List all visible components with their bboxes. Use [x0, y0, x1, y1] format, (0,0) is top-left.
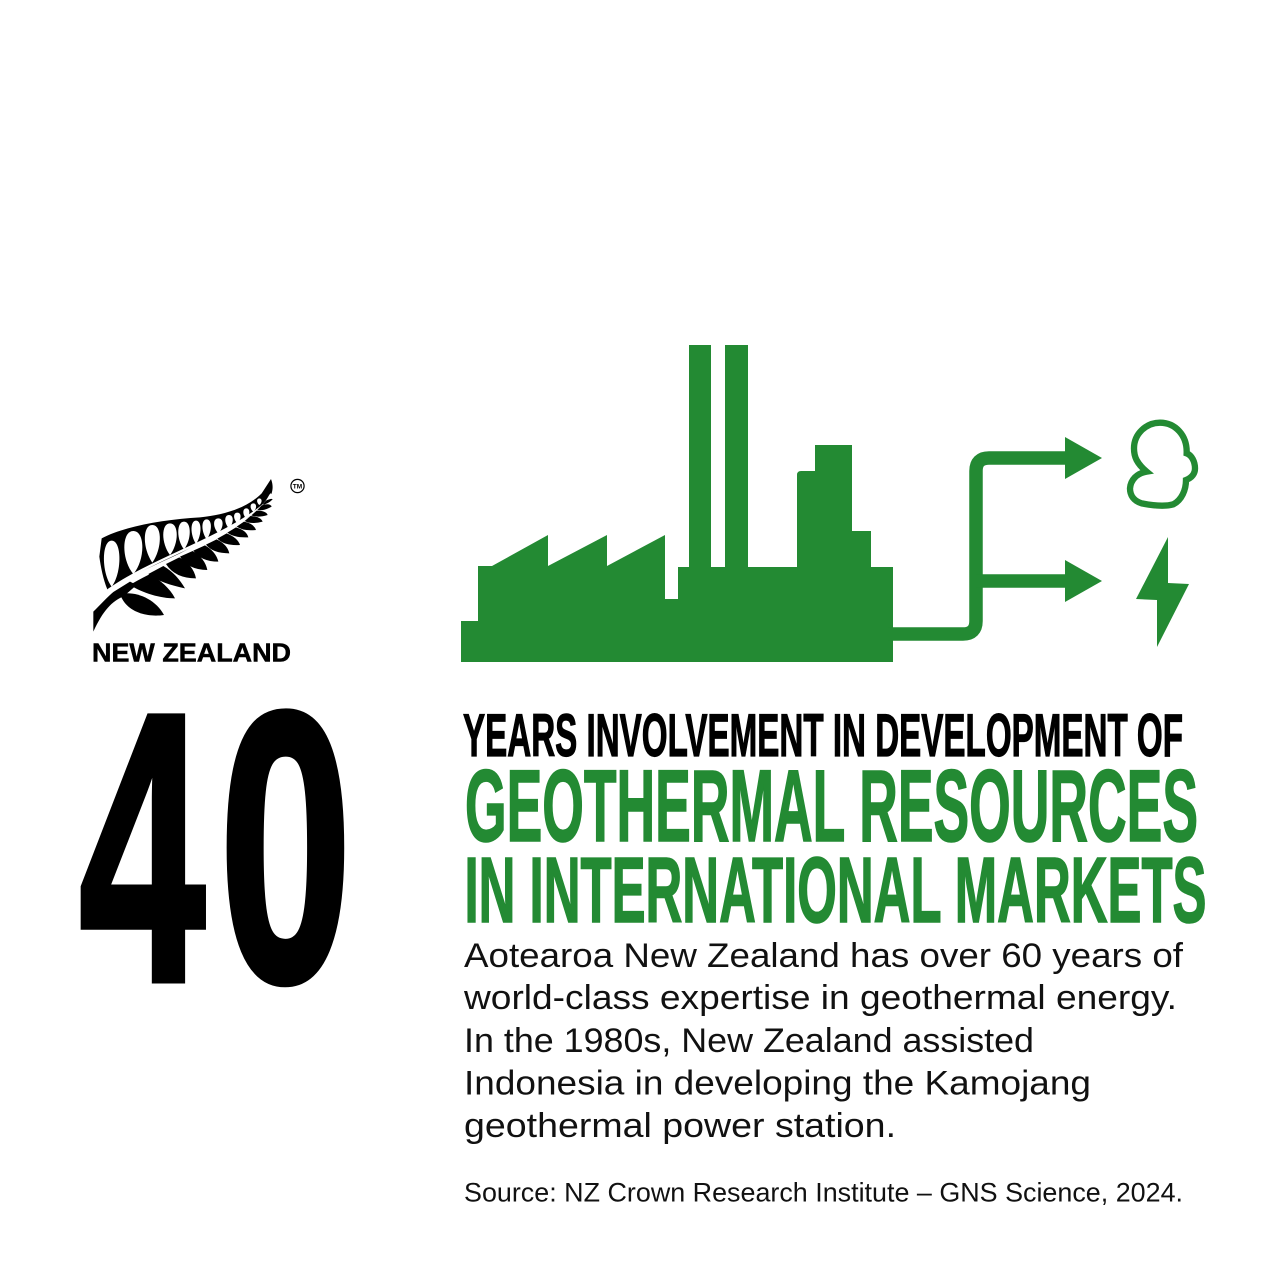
big number 40: 0	[219, 633, 352, 1062]
arrowhead: lower	[1065, 560, 1102, 602]
body text	[463, 937, 1184, 1145]
wordmark: New Zealand: NEW ZEALAND	[92, 640, 291, 668]
trademark symbol	[291, 479, 304, 493]
trademark symbol: TM	[293, 483, 302, 490]
big number 40	[79, 632, 352, 1062]
icon: lightning bolt	[1136, 537, 1189, 647]
icon: steam cloud	[1130, 423, 1195, 506]
body text: In the 1980s, New Zealand assisted	[464, 1022, 1034, 1060]
icon: silver fern	[93, 479, 273, 632]
body text: geothermal power station.	[464, 1107, 896, 1145]
body text: Aotearoa New Zealand has over 60 years of	[464, 937, 1184, 975]
arrowhead: upper	[1065, 437, 1102, 479]
body text: Indonesia in developing the Kamojang	[464, 1064, 1091, 1102]
big number 40: 4	[79, 632, 207, 1062]
body text: world-class expertise in geothermal energy.	[463, 979, 1177, 1017]
icon: green factory	[461, 345, 893, 662]
arrows: pipes from factory to steam and power	[888, 437, 1102, 634]
logo: New Zealand fern mark	[92, 479, 304, 668]
source note: Source: NZ Crown Research Institute – GNS Science, 2024.	[464, 1178, 1183, 1208]
